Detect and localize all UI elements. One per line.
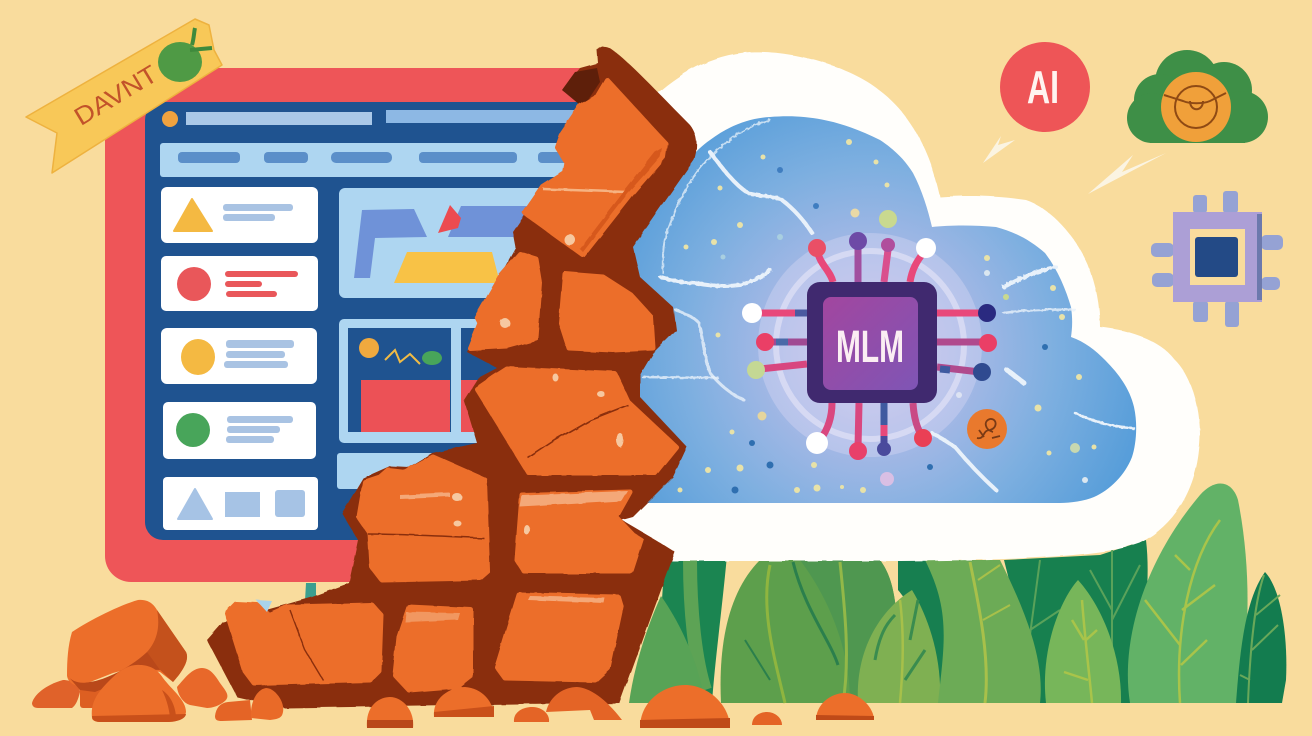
cloud	[622, 52, 1200, 561]
brick: lower left cracked	[227, 600, 381, 683]
rock: pebble six	[752, 712, 782, 725]
monitor: red frame	[105, 68, 605, 582]
banner: label: DAVNT	[69, 60, 163, 131]
card: notice	[161, 328, 317, 384]
small chip body	[1173, 212, 1262, 302]
cloud: blue sky interior	[625, 116, 1136, 503]
green cloud lobes	[1127, 50, 1268, 143]
brick: middle left cracked	[359, 457, 488, 580]
rock: pebble seven	[816, 693, 874, 720]
leaf: tall mid green	[925, 560, 1041, 703]
orange dial	[1161, 72, 1231, 142]
icon: orange badge	[967, 409, 1007, 449]
card: icon row	[163, 477, 318, 530]
panel: diagram	[339, 188, 569, 298]
cloud: white outer brush shape	[622, 52, 1200, 561]
panel: chart window	[339, 319, 539, 443]
icon: small lilac chip	[1151, 191, 1283, 327]
leaf: big right	[1128, 484, 1248, 703]
brick: upper left	[470, 254, 540, 348]
brick: lower middle	[395, 607, 471, 690]
rock: paired stones	[215, 688, 283, 721]
banner	[26, 19, 222, 173]
icon: green cloud with orange dial	[1127, 50, 1268, 143]
chip label: MLM	[836, 321, 904, 372]
cloud: glow rings	[758, 233, 982, 457]
wall: mortar silhouette	[207, 46, 697, 708]
brick wall	[207, 46, 697, 708]
banner: green seal	[158, 28, 212, 82]
rock: right of dome	[177, 668, 227, 708]
icon: AI badge: AI	[1027, 61, 1059, 113]
chip pin heads	[742, 232, 997, 460]
cloud: confetti dots	[678, 139, 1096, 494]
brick: tilted cracked	[477, 369, 676, 473]
icon: AI badge	[1000, 42, 1090, 132]
brick: top with seam	[525, 80, 665, 255]
cloud: chalk cracks	[643, 120, 1134, 490]
brick: lower right	[497, 595, 621, 680]
rock: pebble two	[434, 687, 494, 717]
rock: pebble four	[546, 687, 622, 720]
card: success	[163, 402, 316, 459]
monitor: nav bar	[160, 143, 570, 177]
chip body	[807, 282, 937, 403]
rock: dome front	[92, 665, 186, 722]
small chip pins	[1151, 191, 1283, 327]
banner: ribbon	[26, 19, 222, 173]
leaf: far left	[629, 596, 705, 703]
rock: pebble one	[367, 697, 413, 728]
panel: legacy monitor	[105, 68, 605, 601]
arrow: large from green cloud	[1088, 153, 1166, 194]
leaf: wide mid green	[721, 560, 898, 703]
brick: middle right	[517, 491, 641, 571]
monitor: scrap of bottom shade	[305, 583, 316, 601]
rock: pebble five	[640, 685, 730, 728]
small chip window	[1190, 229, 1245, 285]
rubble	[32, 600, 874, 728]
rock: large tumbled	[67, 600, 187, 692]
small chip core	[1195, 237, 1238, 277]
wall: dark blob at top	[562, 68, 600, 105]
card: warning	[161, 187, 318, 243]
monitor: blue screen	[145, 102, 595, 540]
leaf: back dark right	[1004, 540, 1148, 703]
small chip shaded edge	[1257, 214, 1262, 300]
leaf: front light	[1045, 580, 1121, 703]
leaf: far right dark	[1236, 572, 1286, 703]
foliage	[629, 484, 1286, 703]
rock: left small	[32, 680, 80, 708]
panel: lower bar	[337, 453, 467, 489]
leaf: front olive	[858, 590, 940, 703]
leaf: back dark centre	[898, 560, 973, 703]
chip face	[823, 297, 918, 390]
arrow: small from AI	[983, 136, 1015, 163]
leaf: back dark left	[655, 555, 727, 703]
rock: filler behind dome	[80, 682, 110, 708]
brick: upper right	[561, 274, 653, 350]
rock: pebble three	[514, 707, 549, 722]
card: error	[161, 256, 318, 311]
monitor: title strips	[162, 110, 582, 127]
icon: MLM chip	[742, 232, 997, 460]
chip pins	[757, 245, 985, 448]
dial linework	[1164, 86, 1226, 128]
